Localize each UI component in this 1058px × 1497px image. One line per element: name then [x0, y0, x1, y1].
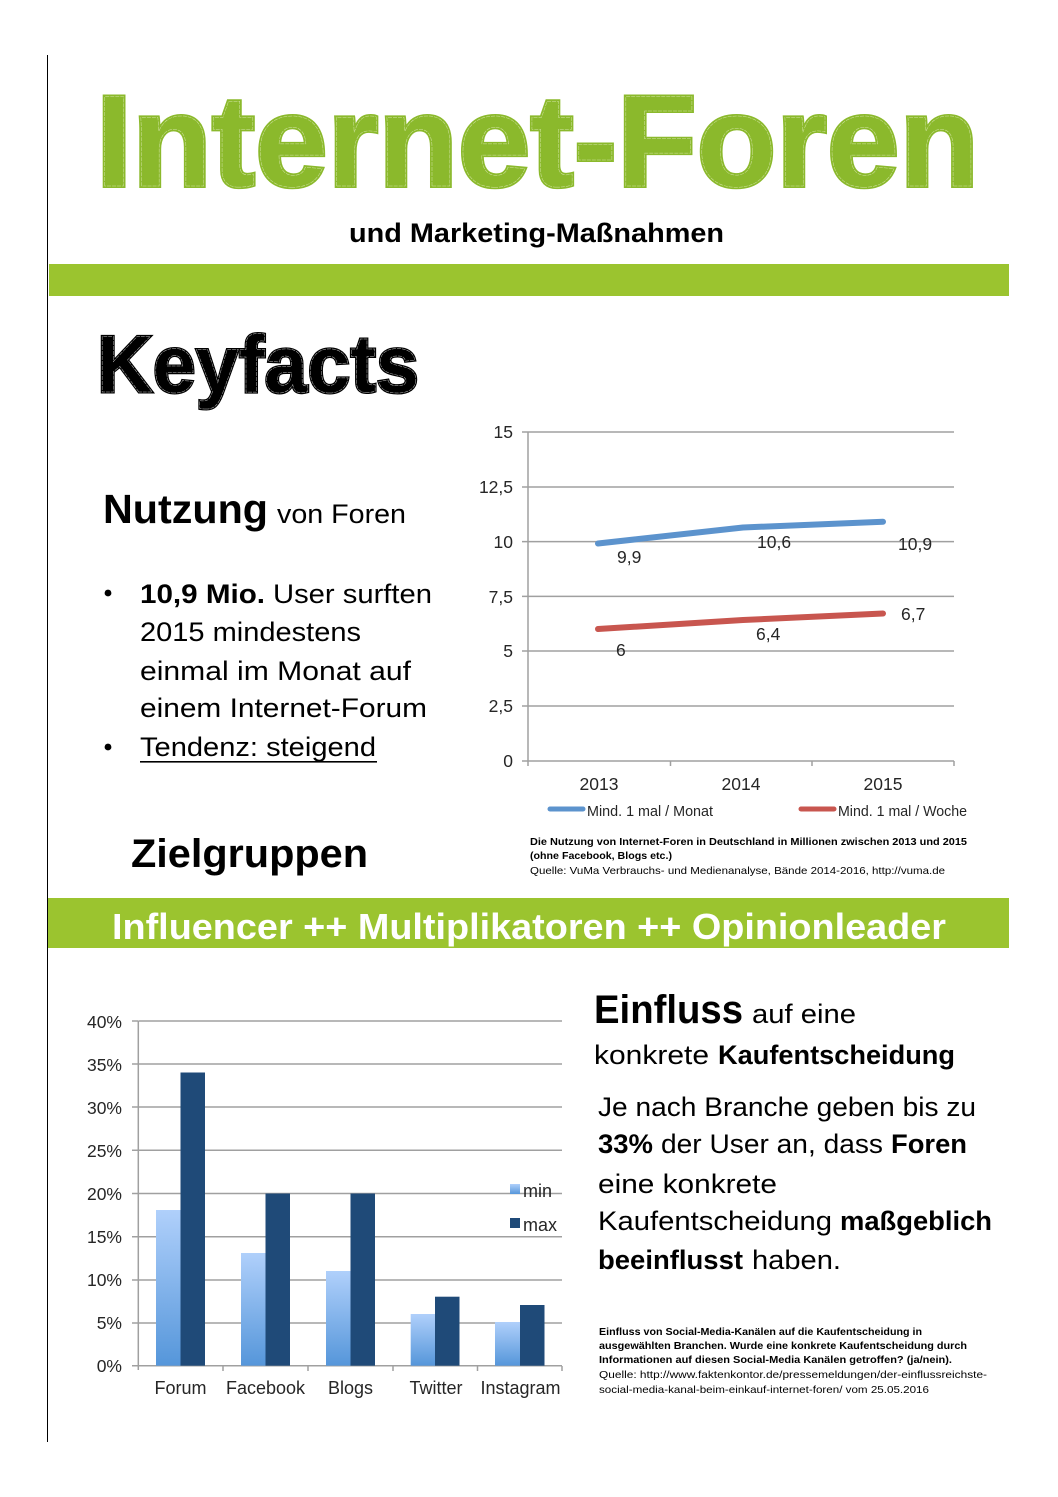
text block: usage bullets: einmal im Monat auf — [140, 656, 412, 686]
chart caption: influence: Einfluss von Social-Media-Kanälen auf die Kaufentscheidung in — [599, 1326, 922, 1338]
text block: influence statement: Kaufentscheidung — [598, 1206, 832, 1236]
line series: weekly — [598, 614, 883, 629]
heading: Einfluss auf eine konkrete Kaufentscheidung: konkrete — [594, 1040, 709, 1070]
line chart: forum usage 2013-2015: 2,5 — [489, 696, 513, 716]
bar chart: influence by channel: 10% — [87, 1270, 122, 1290]
bar chart: influence by channel: 25% — [87, 1141, 122, 1161]
heading: Zielgruppen: Zielgruppen — [131, 832, 368, 876]
line chart: forum usage 2013-2015: 10,9 — [898, 534, 932, 554]
line chart: forum usage 2013-2015: 6 — [616, 640, 626, 660]
text block: usage bullets: einem Internet-Forum — [140, 693, 427, 723]
heading: Nutzung von Foren — [103, 486, 406, 532]
heading: Nutzung von Foren: Nutzung — [103, 486, 268, 532]
bar chart: influence by channel: 40% — [87, 1012, 122, 1032]
bars: min — [156, 1210, 520, 1366]
title: Internet-Foren — [96, 68, 979, 214]
bar chart: influence by channel: 5% — [97, 1313, 122, 1333]
text block: influence statement: eine konkrete — [598, 1169, 777, 1199]
line chart: forum usage 2013-2015: 5 — [503, 641, 513, 661]
heading: Einfluss auf eine konkrete Kaufentscheidung — [594, 988, 955, 1070]
line chart: forum usage 2013-2015: 2013 — [580, 774, 618, 794]
line series: monthly — [598, 522, 883, 544]
title: Internet-Foren — [96, 68, 979, 214]
text block: influence statement — [598, 1092, 992, 1275]
bar chart legend: max — [523, 1215, 557, 1235]
heading: Keyfacts: Keyfacts — [97, 320, 419, 410]
text block: influence statement: Foren — [891, 1129, 967, 1159]
line chart: forum usage 2013-2015: 15 — [494, 422, 513, 442]
line chart: forum usage 2013-2015: 10,6 — [757, 532, 791, 552]
text block: usage bullets: 2015 mindestens — [140, 617, 361, 647]
bar chart: influence by channel — [87, 1012, 562, 1398]
chart caption: influence: ausgewählten Branchen. Wurde eine konkrete Kaufentscheidung durch — [599, 1340, 967, 1352]
bar chart: influence by channel: 30% — [87, 1098, 122, 1118]
bar chart: influence by channel: Blogs — [328, 1378, 373, 1398]
text block: influence statement: beeinflusst — [598, 1245, 743, 1275]
heading: Keyfacts: Keyfacts — [97, 320, 419, 410]
text block: influence statement: maßgeblich — [840, 1206, 992, 1236]
bar chart: influence by channel: 35% — [87, 1055, 122, 1075]
green banner: target groups — [48, 898, 1009, 948]
heading: Einfluss auf eine konkrete Kaufentscheidung: auf eine — [752, 999, 856, 1029]
bar chart legend — [510, 1181, 557, 1235]
line chart: forum usage 2013-2015: 10 — [494, 532, 513, 552]
bar chart: influence by channel: Instagram — [480, 1378, 561, 1398]
text block: influence statement: 33% — [598, 1129, 653, 1159]
bar chart legend: min — [523, 1181, 552, 1201]
line chart: forum usage 2013-2015: 6,7 — [901, 604, 925, 624]
chart caption: influence: Quelle: http://www.faktenkontor.de/pressemeldungen/der-einflussreichste- — [599, 1369, 988, 1381]
bars: max — [180, 1072, 544, 1366]
text block: usage bullets: Tendenz: steigend — [140, 732, 376, 762]
bar chart: influence by channel: 0% — [97, 1356, 122, 1376]
text block: usage bullets: 10,9 Mio. — [140, 579, 265, 609]
chart caption: usage: (ohne Facebook, Blogs etc.) — [530, 850, 672, 862]
chart caption: influence: social-media-kanal-beim-einkauf-internet-foren/ vom 25.05.2016 — [599, 1384, 929, 1396]
green banner: target groups: Influencer ++ Multiplikatoren ++ Opinionleader — [112, 906, 946, 947]
heading: Einfluss auf eine konkrete Kaufentscheidung: Einfluss — [594, 988, 743, 1032]
line chart: forum usage 2013-2015: 0 — [503, 751, 513, 771]
chart caption: usage — [530, 836, 967, 877]
chart caption: influence — [599, 1326, 988, 1396]
heading: Einfluss auf eine konkrete Kaufentscheidung: Kaufentscheidung — [718, 1040, 955, 1070]
line chart: forum usage 2013-2015 — [479, 422, 967, 820]
heading: Nutzung von Foren: von Foren — [277, 499, 406, 529]
bar chart: influence by channel: 15% — [87, 1227, 122, 1247]
top green band — [49, 264, 1009, 296]
chart caption: influence: Informationen auf diesen Social-Media Kanälen getroffen? (ja/nein). — [599, 1354, 952, 1366]
bar chart: influence by channel: Facebook — [226, 1378, 306, 1398]
chart legend: Mind. 1 mal / Monat — [587, 804, 713, 820]
line chart: forum usage 2013-2015: 6,4 — [756, 624, 781, 644]
subtitle: und Marketing-Maßnahmen — [349, 218, 724, 248]
text block: influence statement: haben. — [752, 1245, 841, 1275]
chart legend: Mind. 1 mal / Woche — [838, 804, 967, 820]
line chart: forum usage 2013-2015: 9,9 — [617, 547, 641, 567]
text block: influence statement: der User an, dass — [661, 1129, 883, 1159]
line chart: forum usage 2013-2015: 2014 — [722, 774, 761, 794]
bar chart: influence by channel: Forum — [154, 1378, 207, 1398]
chart caption: usage: Quelle: VuMa Verbrauchs- und Medienanalyse, Bände 2014-2016, http://vuma.de — [530, 865, 945, 877]
text block: usage bullets: User surften — [273, 579, 432, 609]
bar chart: influence by channel: Twitter — [409, 1378, 463, 1398]
chart legend — [550, 804, 967, 820]
chart caption: usage: Die Nutzung von Internet-Foren in Deutschland in Millionen zwischen 2013 und 2015 — [530, 836, 967, 848]
bar chart: influence by channel: 20% — [87, 1184, 122, 1204]
line chart: forum usage 2013-2015: 12,5 — [479, 477, 513, 497]
line chart: forum usage 2013-2015: 7,5 — [489, 587, 513, 607]
line chart: forum usage 2013-2015: 2015 — [864, 774, 902, 794]
text block: usage bullets — [105, 579, 432, 763]
text block: influence statement: Je nach Branche geben bis zu — [598, 1092, 976, 1122]
